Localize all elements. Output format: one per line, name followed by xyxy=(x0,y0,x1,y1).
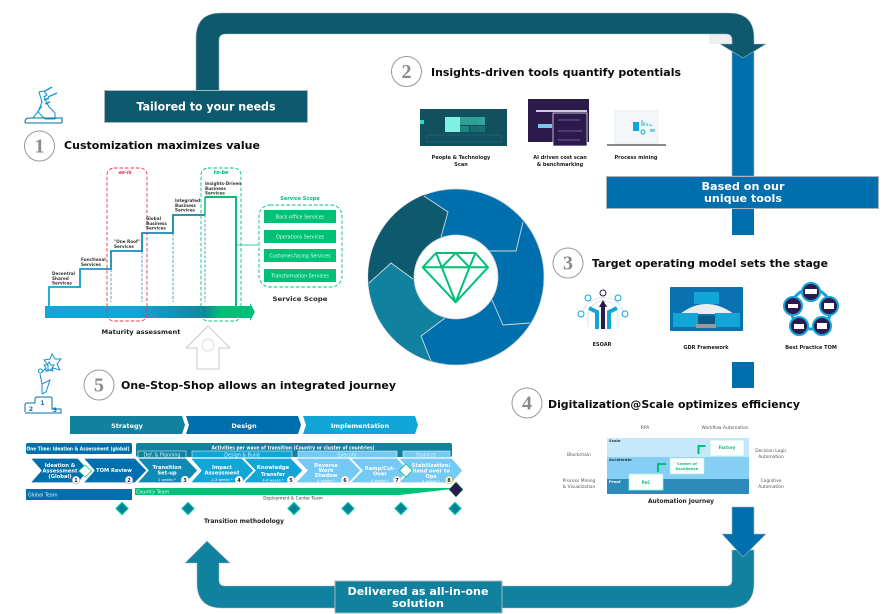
step labels: Services xyxy=(81,262,101,267)
graphic: GDR framework xyxy=(670,287,743,331)
step number badges: 8 xyxy=(447,478,451,484)
band: activities per wave xyxy=(136,443,452,457)
as-is frame xyxy=(107,168,147,321)
step labels: Services xyxy=(175,208,195,212)
box: center of excellence: Excellence xyxy=(676,466,699,471)
chevron labels: Knowledge xyxy=(257,465,290,471)
sub-phase labels: Execute xyxy=(337,452,357,458)
icon: ESOAR xyxy=(578,290,628,329)
number badge 1 xyxy=(24,131,54,161)
band: proof: Proof xyxy=(609,479,621,484)
label: best practice TOM: Best Practice TOM xyxy=(785,345,837,351)
caption: automation journey: Automation Journey xyxy=(648,498,714,505)
labels: tools: Process mining xyxy=(615,155,658,161)
number badge 3: 3 xyxy=(563,252,573,274)
box: pilot: PoC xyxy=(642,480,650,485)
chevron labels: Stabilization/ xyxy=(412,463,450,469)
chevron labels: Assessment xyxy=(43,468,78,474)
step number badges: 7 xyxy=(395,478,399,484)
callout: delivered as all-in-one solution: solution xyxy=(392,597,444,610)
callout: based on our unique tools: Based on our xyxy=(702,180,785,193)
step labels: Business xyxy=(175,203,196,208)
chevron labels: Shadow xyxy=(314,473,338,479)
chevron labels: Ops xyxy=(425,474,437,480)
bar: country team xyxy=(135,488,452,496)
step number badges: 4 xyxy=(237,478,241,484)
step labels: Functional xyxy=(81,257,106,262)
chart: maturity staircase xyxy=(45,168,342,336)
arrow: top flow from tailored needs to unique tools xyxy=(196,13,766,176)
sub-phase labels: Def. & Planning xyxy=(144,452,180,458)
chevron labels: (Global) xyxy=(48,474,72,480)
phase: design: Design xyxy=(231,422,257,430)
labels: tools: & benchmarking xyxy=(537,162,584,168)
service scope box: Operations Services xyxy=(276,234,325,240)
technology labels: Cognitive xyxy=(761,478,782,484)
step number badges: 3 xyxy=(183,478,187,484)
step labels: "One Roof" xyxy=(114,239,140,244)
title 2: Insights-driven tools quantify potentials xyxy=(431,66,681,79)
chevron labels: Ideation & xyxy=(45,463,76,469)
step number badges xyxy=(72,476,453,484)
band: proof xyxy=(607,479,749,494)
maturity caption: Maturity assessment xyxy=(102,329,181,336)
chevron labels: Assessment xyxy=(205,470,240,476)
step labels: Business xyxy=(146,221,167,226)
technology labels: Automation xyxy=(758,484,784,490)
service scope caption: Service Scope xyxy=(272,296,328,303)
step number badges: 1 xyxy=(74,478,78,484)
chevron labels: 4 weeks * xyxy=(317,479,335,483)
service scope box: Transformation Services xyxy=(270,274,329,280)
label: ESOAR: ESOAR xyxy=(593,342,612,348)
connector to service scope xyxy=(236,244,259,246)
callout: delivered as all-in-one solution: Delivered as all-in-one xyxy=(348,585,488,598)
label: GDR framework: GDR Framework xyxy=(683,345,729,351)
chevron labels: Set-up xyxy=(157,470,177,476)
tool: people and technology scan xyxy=(420,109,507,146)
phase: implementation xyxy=(303,416,418,434)
icon: running shoe xyxy=(25,87,62,123)
chevron labels: 4 weeks * xyxy=(422,480,440,484)
chevron labels: Hand over to xyxy=(412,468,450,474)
labels: tools: People & Technology xyxy=(432,155,491,161)
bar: global team: Global Team xyxy=(28,492,58,498)
band: scale: Scale xyxy=(609,438,621,443)
chart: automation journey xyxy=(563,425,787,505)
band: accelerate xyxy=(607,457,749,479)
chevron labels: Transfer xyxy=(261,472,286,478)
technology labels: Automation xyxy=(758,454,784,460)
step labels: Integrated xyxy=(175,198,200,203)
band: scale xyxy=(607,438,749,457)
gate diamonds xyxy=(116,502,461,514)
number badge 2 xyxy=(392,56,422,86)
number badge 4: 4 xyxy=(522,392,532,414)
step labels: Insights-Driven xyxy=(205,181,241,186)
number badge 3 xyxy=(553,248,583,278)
title 3: Target operating model sets the stage xyxy=(592,257,828,270)
technology labels: RPA xyxy=(641,425,649,431)
labels: tools xyxy=(432,155,658,168)
heading: section 1 xyxy=(24,131,260,161)
title 1: Customization maximizes value xyxy=(64,139,260,152)
phase: design xyxy=(186,416,301,434)
heading: section 3 xyxy=(553,248,828,278)
step labels: Services xyxy=(205,190,225,196)
central ring with diamond xyxy=(368,189,544,365)
arrow: blue connector between sections 3 and 4 xyxy=(732,362,754,388)
chevron labels: Ramp/Cut- xyxy=(365,466,395,472)
sub-phase labels xyxy=(138,451,450,458)
service scope box: Service Scope xyxy=(280,196,320,202)
step number badges: 2 xyxy=(127,478,131,484)
go live diamond xyxy=(449,482,463,497)
chevron labels: 4-6 weeks * xyxy=(262,478,284,482)
step labels xyxy=(52,181,241,286)
phase: strategy xyxy=(70,416,185,434)
transition methodology xyxy=(26,416,463,525)
box: factory: Factory xyxy=(719,445,736,450)
chevron labels: Work xyxy=(318,468,334,474)
chevron labels: Over xyxy=(373,472,387,478)
step labels: Shared xyxy=(52,276,69,281)
icon: diamond xyxy=(423,253,488,302)
box: center of excellence xyxy=(670,458,704,474)
arrow: hollow up arrow xyxy=(186,326,230,369)
heading: section 2 xyxy=(392,56,681,86)
as-is frame: as-is xyxy=(118,170,132,176)
heading: section 5 xyxy=(84,370,396,400)
chevron labels: 2-3 weeks * xyxy=(211,478,233,482)
chevron labels: Transition xyxy=(152,465,182,471)
bar: country team: Country Team xyxy=(136,490,170,496)
step labels: Global xyxy=(146,216,162,221)
chevrons xyxy=(30,458,463,483)
stair steps xyxy=(49,215,205,306)
step labels: Services xyxy=(146,226,166,230)
caption: transition methodology: Transition methodology xyxy=(204,518,284,525)
number badge 1: 1 xyxy=(34,136,44,158)
icon: star trophy podium xyxy=(25,354,61,414)
callout: delivered as all-in-one solution xyxy=(335,581,502,613)
technology labels: Process Mining xyxy=(563,478,596,484)
callout: tailored to your needs xyxy=(104,90,308,122)
service scope box: Customer-facing Services xyxy=(269,254,331,260)
technology labels: Decision Logic xyxy=(755,448,787,454)
arrow: blue connector below unique tools xyxy=(732,208,754,235)
chevron labels: Impact xyxy=(212,465,233,471)
step number badges: 6 xyxy=(343,478,347,484)
chevron labels: Reverse xyxy=(314,463,338,469)
phase: implementation: Implementation xyxy=(331,422,389,430)
icon: star trophy podium: 3 xyxy=(53,407,57,414)
step labels: Services xyxy=(52,280,72,286)
callout: based on our unique tools xyxy=(606,176,878,208)
icon: star trophy podium: 1 xyxy=(40,400,45,407)
growth arrows xyxy=(658,446,706,472)
tool: process mining laptop xyxy=(607,111,666,145)
technology labels: & Visualization xyxy=(563,484,595,490)
callout: based on our unique tools: unique tools xyxy=(704,192,782,205)
phase: strategy: Strategy xyxy=(111,422,144,430)
band: accelerate: Accelerate xyxy=(609,457,632,462)
step labels: Business xyxy=(205,186,226,191)
title 4: Digitalization@Scale optimizes efficiency xyxy=(548,398,800,411)
number badge 4 xyxy=(512,388,542,418)
green target step xyxy=(205,197,236,306)
box: center of excellence: Center of xyxy=(677,461,697,466)
arrow: bottom flow from automation back to transition xyxy=(185,507,766,608)
tool: AI cost scan xyxy=(528,99,589,146)
label: deployment team: Deployment & Center Team xyxy=(263,496,323,502)
step number badges: 5 xyxy=(289,478,293,484)
box: factory xyxy=(710,440,744,456)
service scope box: Back-office Services xyxy=(276,214,325,220)
technology labels xyxy=(563,425,787,490)
band: one time xyxy=(26,443,132,454)
ring segment: dark teal xyxy=(368,195,448,283)
ring segment: teal xyxy=(368,263,445,361)
title 5: One-Stop-Shop allows an integrated journey xyxy=(121,379,396,392)
bar: global team xyxy=(26,489,132,500)
labels: tools: AI driven cost scan xyxy=(533,155,587,161)
chevron labels: TOM Review xyxy=(96,468,132,474)
box: pilot xyxy=(629,474,663,490)
number badge 5 xyxy=(84,370,114,400)
step labels: Services xyxy=(114,244,134,249)
icon: star trophy podium: 2 xyxy=(29,406,33,413)
number badge 5: 5 xyxy=(94,374,104,396)
step labels: Decentral xyxy=(52,271,76,276)
to-be frame xyxy=(201,168,241,321)
number badge 2: 2 xyxy=(402,61,412,83)
to-be frame: to-be xyxy=(214,170,229,176)
labels: tools: Scan xyxy=(454,162,468,168)
sub-phase labels: Stabilize xyxy=(416,452,436,458)
heading: section 4 xyxy=(512,388,800,418)
technology labels: Workflow Automation xyxy=(701,425,749,431)
graphic: best practice TOM xyxy=(784,283,838,335)
chevron labels: 2 weeks * xyxy=(158,478,176,482)
callout: tailored to your needs: Tailored to your needs xyxy=(136,100,276,114)
band: one time: One Time: Ideation & Assessment (global) xyxy=(26,446,130,452)
ring centre xyxy=(414,235,498,319)
band: activities per wave: Activities per wave of transition (Country or cluster of countries) xyxy=(212,445,374,451)
technology labels: Blockchain xyxy=(567,452,591,458)
chevron labels: 4 weeks * xyxy=(371,479,389,483)
service scope box xyxy=(259,196,342,287)
chevron labels xyxy=(43,463,450,484)
maturity bar xyxy=(45,303,255,321)
sub-phase labels: Design & Build xyxy=(224,452,260,458)
milestone diamonds xyxy=(78,464,412,477)
